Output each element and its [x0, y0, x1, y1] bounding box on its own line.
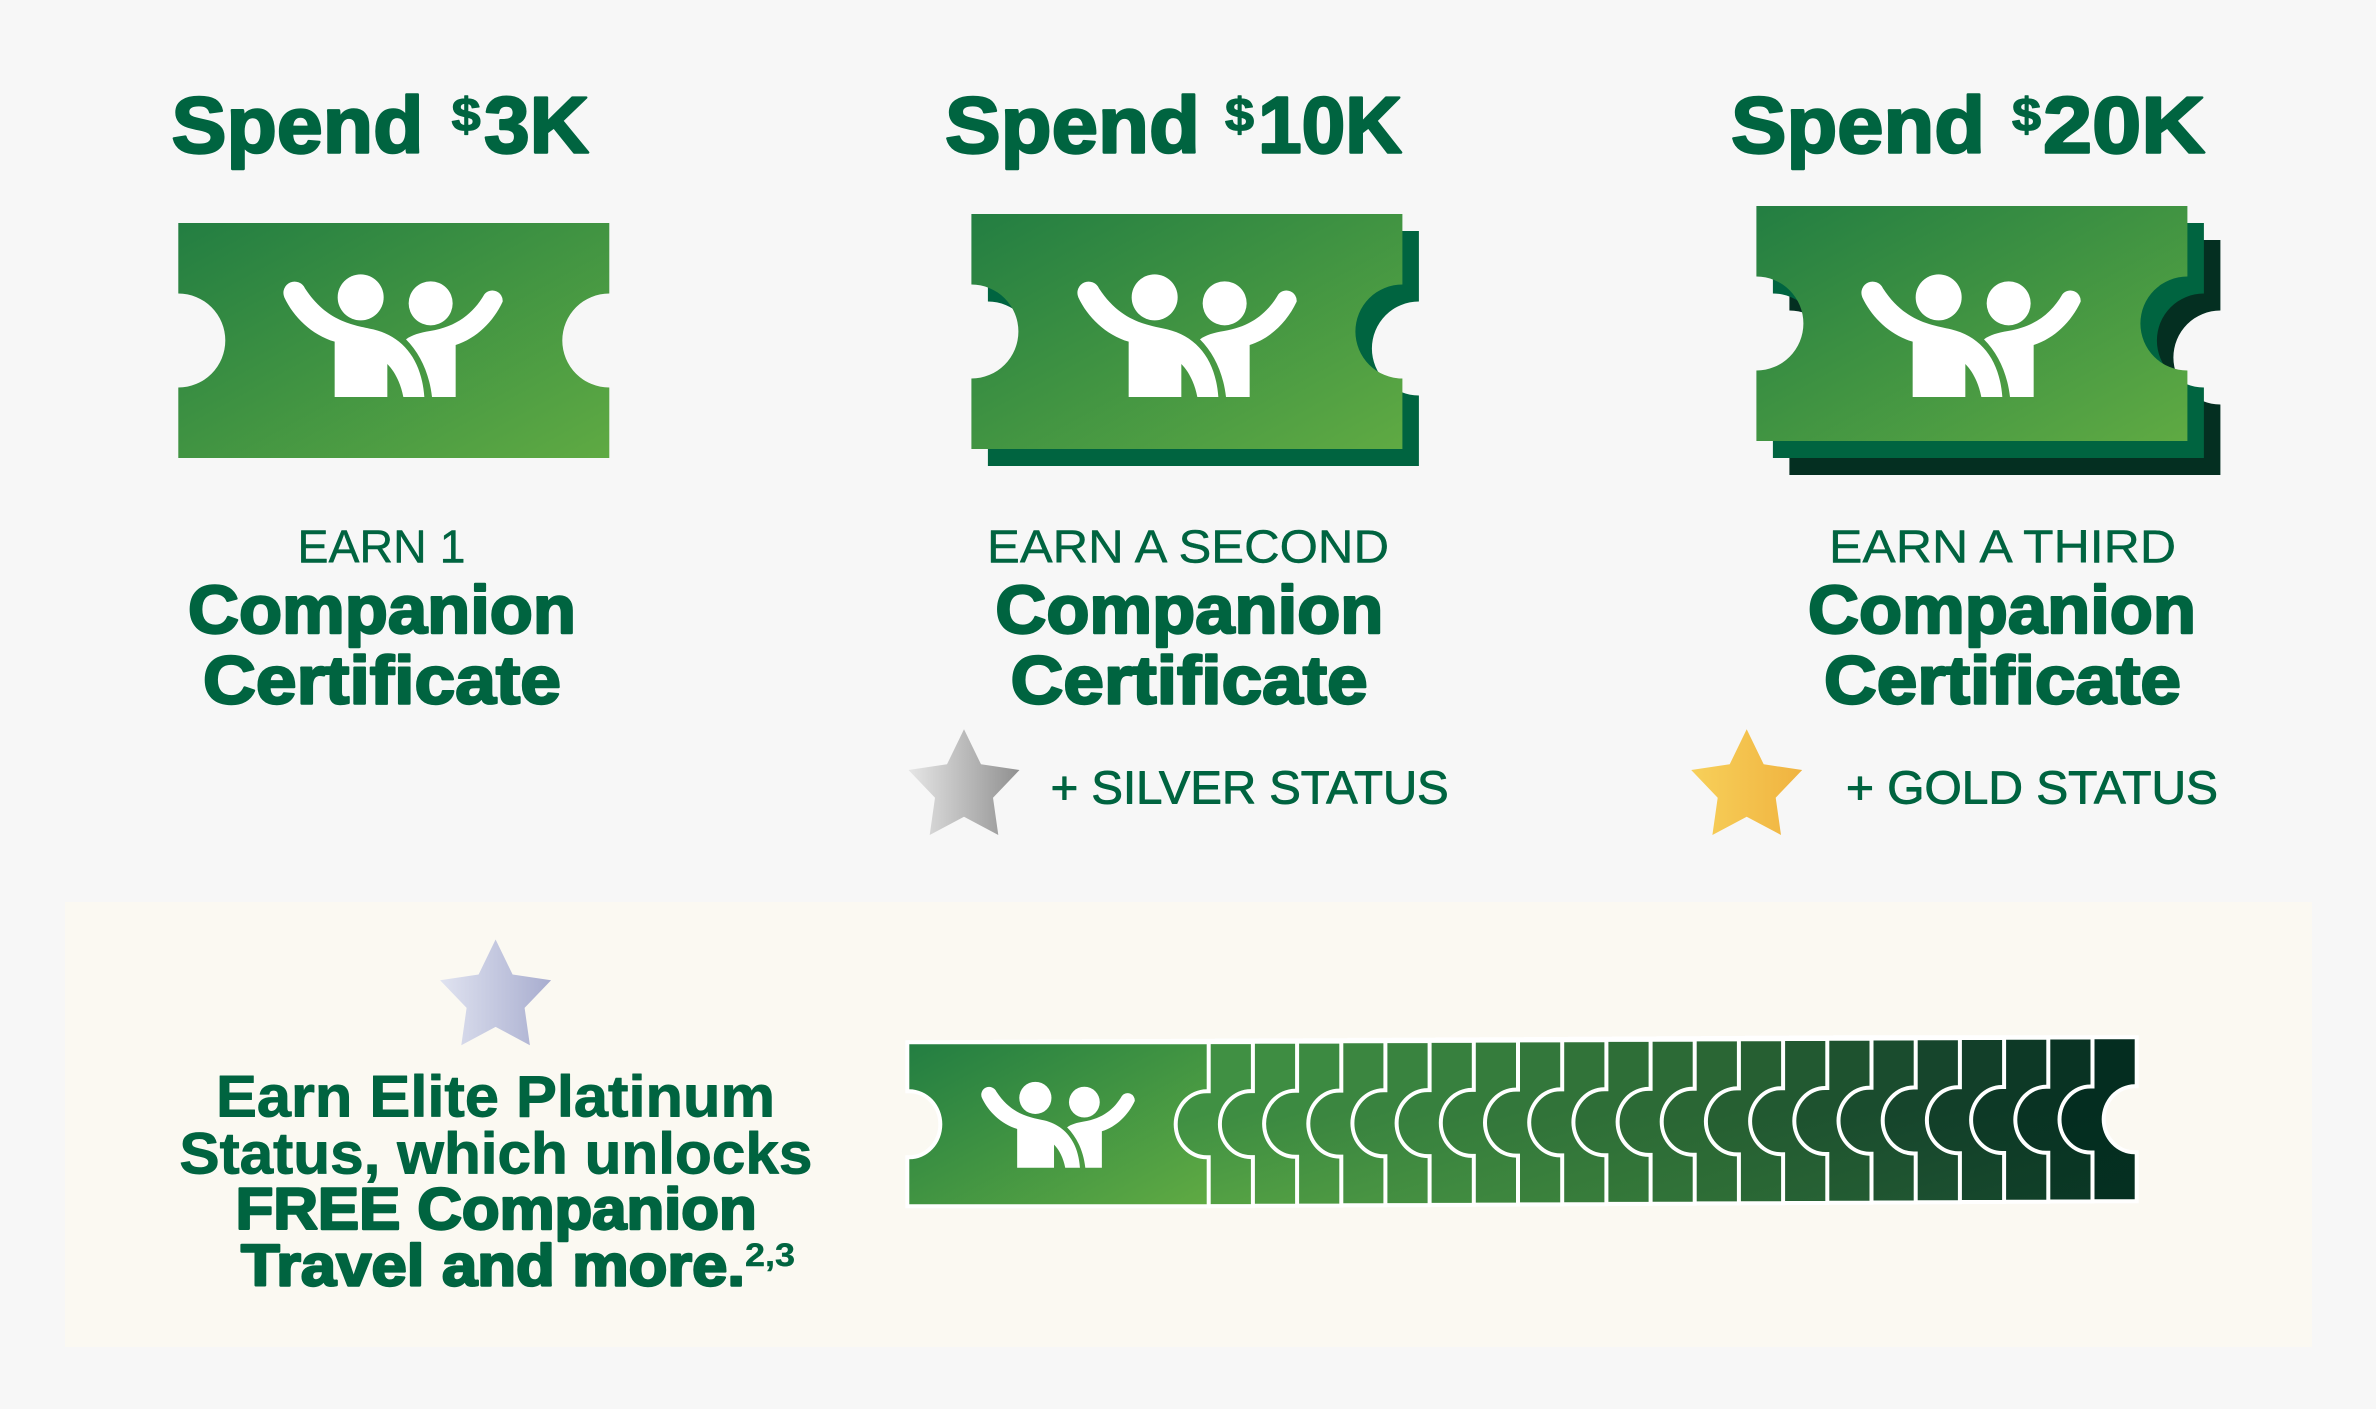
- panel: elite platinum: [65, 902, 2312, 1347]
- text: earn a second companion certificate: Companion: [995, 572, 1383, 648]
- text: elite platinum description: Earn Elite Platinum: [216, 1065, 775, 1130]
- ticket stack: many certificates: [909, 1039, 2135, 1204]
- text: earn 1 companion certificate: Companion: [188, 572, 576, 648]
- icon: silver star: [908, 729, 1020, 835]
- heading: Spend $20K: $: [2012, 88, 2041, 141]
- text: elite platinum description: [179, 1065, 812, 1299]
- heading: Spend $10K: [945, 81, 1402, 170]
- text: earn a third companion certificate: Certificate: [1824, 642, 2181, 718]
- text: plus silver status: + SILVER STATUS: [1051, 761, 1449, 813]
- text: elite platinum description: Status, which unlocks: [179, 1121, 812, 1186]
- text: elite platinum description: FREE Companion: [236, 1177, 757, 1242]
- text: earn 1 companion certificate: [188, 521, 576, 718]
- heading: Spend $20K: [1731, 81, 2205, 170]
- heading: Spend $3K: [172, 81, 589, 170]
- text: earn 1 companion certificate: Certificate: [203, 642, 561, 718]
- text: earn a second companion certificate: EARN A SECOND: [987, 521, 1389, 573]
- text: earn a third companion certificate: EARN A THIRD: [1829, 521, 2176, 573]
- icon: two people waving: [1077, 274, 1297, 397]
- text: plus gold status: + GOLD STATUS: [1846, 761, 2218, 813]
- icon: two people waving small: [981, 1082, 1135, 1168]
- text: earn 1 companion certificate: EARN 1: [298, 521, 466, 573]
- text: elite platinum description: Travel and more.: [241, 1234, 745, 1299]
- heading: Spend $3K: $: [452, 88, 481, 141]
- ticket: one certificate: [178, 223, 609, 458]
- heading: Spend $10K: Spend: [945, 81, 1200, 170]
- heading: Spend $10K: $: [1225, 88, 1254, 141]
- ticket: two stacked certificates: [971, 214, 1419, 466]
- ticket: three stacked certificates: [1756, 206, 2220, 475]
- text: elite platinum description: 2,3: [745, 1237, 795, 1273]
- heading: Spend $10K: 10K: [1258, 81, 1402, 170]
- heading: Spend $20K: 20K: [2043, 81, 2205, 170]
- heading: Spend $3K: Spend: [172, 81, 424, 170]
- text: earn a second companion certificate: Certificate: [1011, 642, 1368, 718]
- icon: gold star: [1691, 729, 1802, 835]
- heading: Spend $20K: Spend: [1731, 81, 1985, 170]
- text: earn a second companion certificate: [987, 521, 1389, 718]
- icon: two people waving: [283, 274, 503, 397]
- heading: Spend $3K: 3K: [484, 81, 589, 170]
- icon: platinum star: [440, 940, 551, 1045]
- icon: two people waving: [1861, 274, 2081, 397]
- text: earn a third companion certificate: [1808, 521, 2196, 718]
- text: earn a third companion certificate: Companion: [1808, 572, 2196, 648]
